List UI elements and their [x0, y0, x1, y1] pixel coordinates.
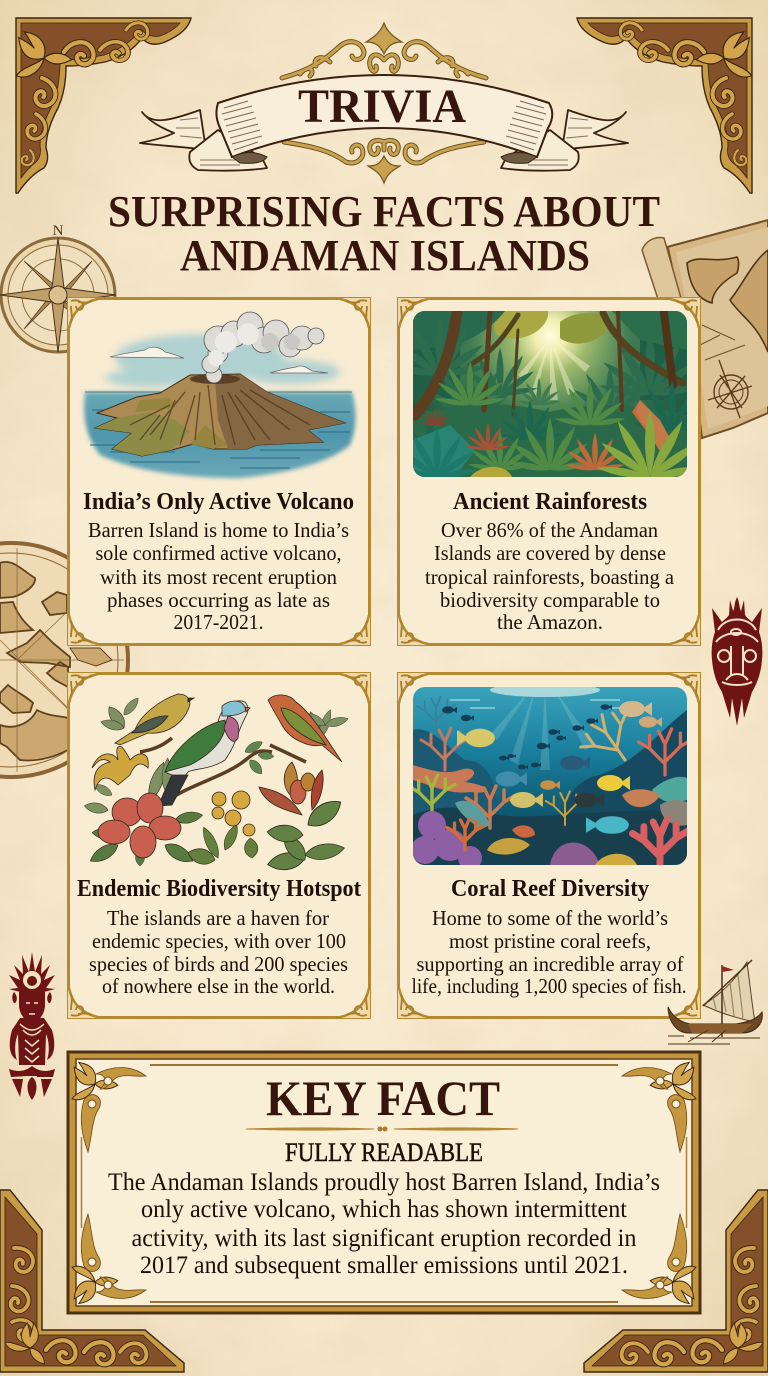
card text: Islands are covered by dense — [434, 541, 666, 565]
reef fish — [442, 701, 662, 834]
card text — [89, 906, 348, 998]
hibiscus — [87, 810, 204, 867]
illustration: coral reef — [409, 683, 691, 870]
decoration: treasure map scroll — [642, 220, 768, 438]
key fact text: The Andaman Islands proudly host Barren Island, India’s — [108, 1167, 660, 1196]
card text: phases occurring as late as — [107, 588, 330, 612]
panel: key fact — [57, 1052, 711, 1313]
ornament above banner — [282, 23, 486, 78]
yellow lily — [92, 747, 148, 790]
right bird — [268, 695, 342, 762]
card text: sole confirmed active volcano, — [96, 541, 342, 565]
icon: tribal mask — [712, 597, 762, 726]
left bird — [115, 694, 194, 745]
small yellow flowers — [186, 823, 259, 867]
card heading: India’s Only Active Volcano — [83, 489, 354, 515]
key fact text: 2017 and subsequent smaller emissions until 2021. — [140, 1250, 628, 1279]
corner ornament: bottom left — [0, 1190, 184, 1372]
panel: rainforest card — [390, 298, 712, 645]
heading: key fact: KEY FACT — [266, 1070, 500, 1126]
illustration: volcano — [84, 312, 356, 478]
foliage — [84, 695, 349, 815]
icon: tribal figure — [9, 952, 55, 1100]
card text: Barren Island is home to India’s — [88, 518, 349, 542]
card text: 2017-2021. — [174, 610, 264, 634]
key fact text: only active volcano, which has shown intermittent — [141, 1194, 627, 1223]
card text: endemic species, with over 100 — [92, 929, 346, 953]
panel: biodiversity card — [68, 673, 370, 1018]
corner ornament: top left — [0, 18, 191, 193]
card text: of nowhere else in the world. — [102, 974, 335, 998]
center pigeon — [158, 701, 250, 806]
card text — [88, 518, 349, 634]
card text: The islands are a haven for — [107, 906, 329, 930]
ribbon band — [216, 75, 552, 163]
card text: species of birds and 200 species — [89, 952, 348, 976]
card text: biodiversity comparable to — [440, 588, 660, 612]
subheading: fully readable: FULLY READABLE — [285, 1138, 483, 1167]
card text: most pristine coral reefs, — [449, 929, 651, 953]
right flowers — [266, 795, 346, 873]
icon: compass rose — [0, 223, 116, 352]
icon: sailing boat — [668, 960, 762, 1044]
corner ornament: bottom right — [584, 1190, 768, 1372]
icon: compass rose: N — [53, 223, 64, 239]
card text — [425, 518, 675, 634]
card heading: Coral Reef Diversity — [451, 876, 649, 902]
key fact text — [108, 1167, 660, 1279]
title: trivia: TRIVIA — [298, 80, 466, 133]
corner ornament: top right — [577, 18, 768, 193]
main title — [108, 187, 660, 280]
card text: the Amazon. — [497, 610, 603, 634]
card text: Home to some of the world’s — [432, 906, 668, 930]
main title: SURPRISING FACTS ABOUT — [108, 187, 660, 236]
illustration: rainforest — [413, 311, 687, 477]
card text: tropical rainforests, boasting a — [425, 565, 675, 589]
main title: ANDAMAN ISLANDS — [180, 231, 590, 280]
card heading: Endemic Biodiversity Hotspot — [77, 876, 361, 902]
divider — [246, 1126, 518, 1132]
header banner — [140, 23, 628, 183]
panel: coral reef card — [398, 673, 700, 1018]
decoration: antique world map — [0, 543, 128, 777]
card text: life, including 1,200 species of fish. — [412, 974, 686, 998]
card text: Over 86% of the Andaman — [441, 518, 658, 542]
card text: with its most recent eruption — [100, 565, 337, 589]
ornament below banner — [284, 140, 484, 183]
card text — [412, 906, 686, 998]
illustration: birds and flowers — [84, 694, 349, 873]
card text: supporting an incredible array of — [416, 952, 684, 976]
ribbon tails — [140, 110, 628, 171]
key fact text: activity, with its last significant eruption recorded in — [132, 1223, 637, 1252]
panel: volcano card — [68, 298, 370, 645]
card heading: Ancient Rainforests — [453, 489, 647, 515]
